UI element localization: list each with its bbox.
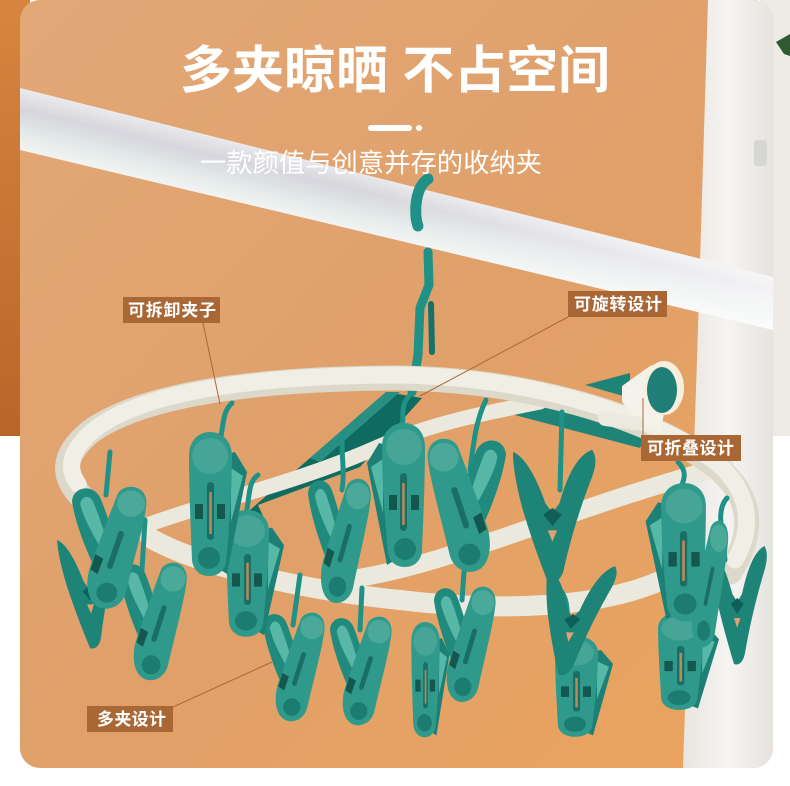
folding teal frame bbox=[250, 373, 641, 516]
subtitle: 一款颜值与创意并存的收纳夹 bbox=[200, 148, 542, 178]
icon: plant leaf bbox=[776, 34, 790, 56]
title: 多夹晾晒 不占空间 bbox=[180, 42, 610, 99]
clip: front V centre bbox=[330, 617, 392, 725]
clip: front V centre-left bbox=[263, 613, 325, 721]
clip: narrow B bbox=[226, 510, 284, 637]
callout: multi-clip design bbox=[87, 662, 272, 732]
callout: foldable design bbox=[641, 398, 741, 461]
clip: right narrow bbox=[692, 520, 728, 648]
clip: narrow A bbox=[189, 432, 247, 576]
clip: narrow lower centre bbox=[411, 622, 450, 737]
clip hooks bbox=[106, 395, 727, 640]
clips back row bbox=[57, 534, 767, 737]
lower ring tubes bbox=[150, 402, 725, 606]
callout: detachable clips bbox=[123, 297, 220, 404]
top-right pale strip bbox=[760, 0, 790, 436]
clip: narrow D bbox=[367, 423, 425, 567]
clip: centre V mirrored bbox=[428, 439, 506, 572]
rotation joint bbox=[597, 361, 684, 432]
white post bbox=[683, 0, 773, 768]
clips front row bbox=[72, 423, 728, 647]
post bracket bbox=[754, 140, 767, 166]
hanging bar bbox=[20, 88, 773, 330]
callout: rotating design bbox=[420, 291, 667, 396]
callout: rotating design: 可旋转设计 bbox=[574, 294, 662, 314]
clip: V lower centre bbox=[434, 587, 496, 702]
main ring tube bbox=[68, 375, 747, 572]
clip: centre-left V bbox=[308, 479, 371, 603]
clip: dark V lower right bbox=[546, 566, 617, 675]
clip: right large narrow bbox=[646, 483, 706, 621]
clip: far left dark bbox=[57, 540, 106, 648]
clip: dark V centre right bbox=[513, 450, 595, 582]
clip: back right low bbox=[658, 612, 719, 710]
hanger hook bbox=[412, 179, 432, 392]
clip: left upper bbox=[72, 487, 146, 609]
clip: dark V far right bbox=[718, 546, 767, 664]
clip: left lower bbox=[120, 563, 187, 680]
clip: narrow lower right bbox=[555, 636, 613, 737]
top-left darker orange strip bbox=[0, 0, 30, 436]
callout: multi-clip design: 多夹设计 bbox=[97, 709, 166, 729]
divider dash and dot bbox=[368, 125, 422, 131]
callout: foldable design: 可折叠设计 bbox=[647, 439, 734, 458]
callout: detachable clips: 可拆卸夹子 bbox=[128, 301, 216, 320]
